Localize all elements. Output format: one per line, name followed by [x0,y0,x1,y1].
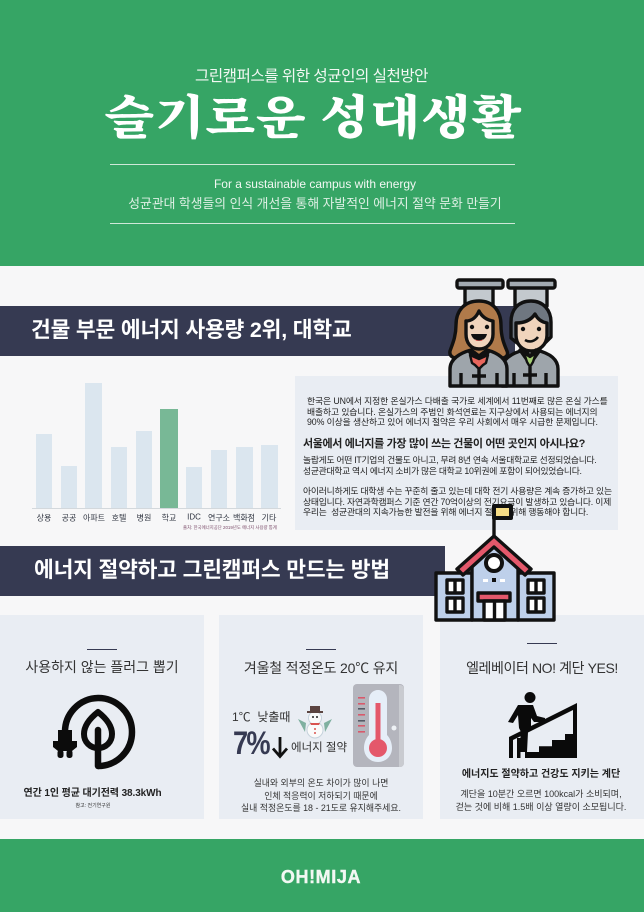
icon: down arrow [272,737,288,758]
man [515,286,547,306]
subtitle: 그린캠퍼스를 위한 성균인의 실천방안 [195,68,428,85]
paragraph 2: 성균관대학교 역시 에너지 소비가 많은 대학교 10위권에 포함이 되어있었습니다. [303,466,582,476]
bar chart: 학교 [162,512,176,522]
panel: winter temperature [219,615,423,819]
banner: section 2 [0,546,445,596]
source note: 참고: 전기연구원 [76,802,110,808]
description: 실내와 외부의 온도 차이가 많이 나면 [254,778,388,788]
panel: explanation text [295,376,618,530]
paragraph 3: 상태입니다. 자연과학캠퍼스 기준 연간 70억이상의 전기요금이 발생하고 있습니다. 이제 [303,496,611,506]
bar chart: 상용 [37,512,51,522]
icon: plug and leaf [53,694,136,770]
panel: stairs [440,615,644,819]
footer band [0,839,644,912]
card title: 사용하지 않는 플러그 뽑기 [25,659,179,675]
bar chart [32,383,281,530]
rule top [110,164,515,165]
paragraph 2 [303,455,597,476]
panel: unplug [0,615,204,819]
paragraph 1 [307,396,608,427]
main title: 슬기로운 성대생활 [104,93,522,145]
description: 인체 적응력이 저하되기 때문에 [264,790,378,800]
paragraph 1: 한국은 UN에서 지정한 온실가스 다배출 국가로 세계에서 11번째로 많은 온실 가스를 [307,396,608,406]
accent rule [527,643,557,644]
bar chart: 출처: 한국에너지공단 2019년도 에너지 사용량 통계 [183,524,277,530]
1 degree label: 1℃ 낮출때 [232,710,290,724]
accent rule [306,649,336,650]
description [456,789,626,812]
paragraph 3: 아이러니하게도 대학생 수는 꾸준히 줄고 있는데 대학 전기 사용량은 계속 증가하고 있는 [303,486,612,496]
icon: person on stairs [508,692,577,758]
bar chart: 백화점 [233,512,255,522]
description [241,778,401,813]
section 2 heading: 에너지 절약하고 그린캠퍼스 만드는 방법 [34,558,390,582]
card title: 엘레베이터 NO! 계단 YES! [466,660,618,676]
icon: thermometer [353,684,404,767]
bar chart: 연구소 [208,514,230,522]
header band [0,0,644,266]
energy saving label: 에너지 절약 [291,742,347,754]
korean tagline: 성균관대 학생들의 인식 개선을 통해 자발적인 에너지 절약 문화 만들기 [128,196,502,211]
logo: OH!MIJA [281,867,361,887]
description: 계단을 10분간 오르면 100kcal가 소비되며, [460,789,622,799]
banner: section 1 [0,306,515,356]
section 1 heading: 건물 부문 에너지 사용량 2위, 대학교 [31,318,352,342]
icon: graduates [448,278,560,388]
icon: snowman [298,706,332,738]
icon: school building [434,504,556,622]
paragraph 1: 배출하고 있습니다. 온실가스의 주범인 화석연료는 지구상에서 사용되는 에너지의 [307,406,598,416]
card title: 겨울철 적정온도 20℃ 유지 [244,660,398,676]
bar chart: 기타 [262,514,277,522]
paragraph 3 [303,486,612,517]
bar chart: 병원 [137,514,151,522]
paragraph 2: 놀랍게도 어떤 IT기업의 건물도 아니고, 무려 8년 연속 서울대학교로 선정되었습니다. [303,455,597,465]
description: 실내 적정온도를 18 - 21도로 유지해주세요. [241,803,401,813]
woman [465,286,493,306]
question heading: 서울에서 에너지를 가장 많이 쓰는 건물이 어떤 곳인지 아시나요? [303,438,585,450]
7 percent stat: 7% [233,725,269,761]
paragraph 1: 90% 이상을 생산하고 있어 에너지 절약은 우리 사회에서 매우 시급한 문제입니다. [307,417,598,427]
rule bottom [110,223,515,224]
bar chart: IDC [187,512,201,522]
bar chart: 호텔 [112,514,126,522]
stat text: 연간 1인 평균 대기전력 38.3kWh [24,788,161,799]
english tagline: For a sustainable campus with energy [214,177,416,191]
description: 걷는 것에 비해 1.5배 이상 열량이 소모됩니다. [456,802,626,812]
accent rule [87,649,117,650]
subheading: 에너지도 절약하고 건강도 지키는 계단 [462,769,620,780]
bar chart: 공공 [62,514,76,522]
paragraph 3: 우리는 성균관대의 지속가능한 발전을 위해 에너지 절약을 위해 행동해야 합니다. [303,507,588,517]
bar chart: 아파트 [83,512,105,522]
